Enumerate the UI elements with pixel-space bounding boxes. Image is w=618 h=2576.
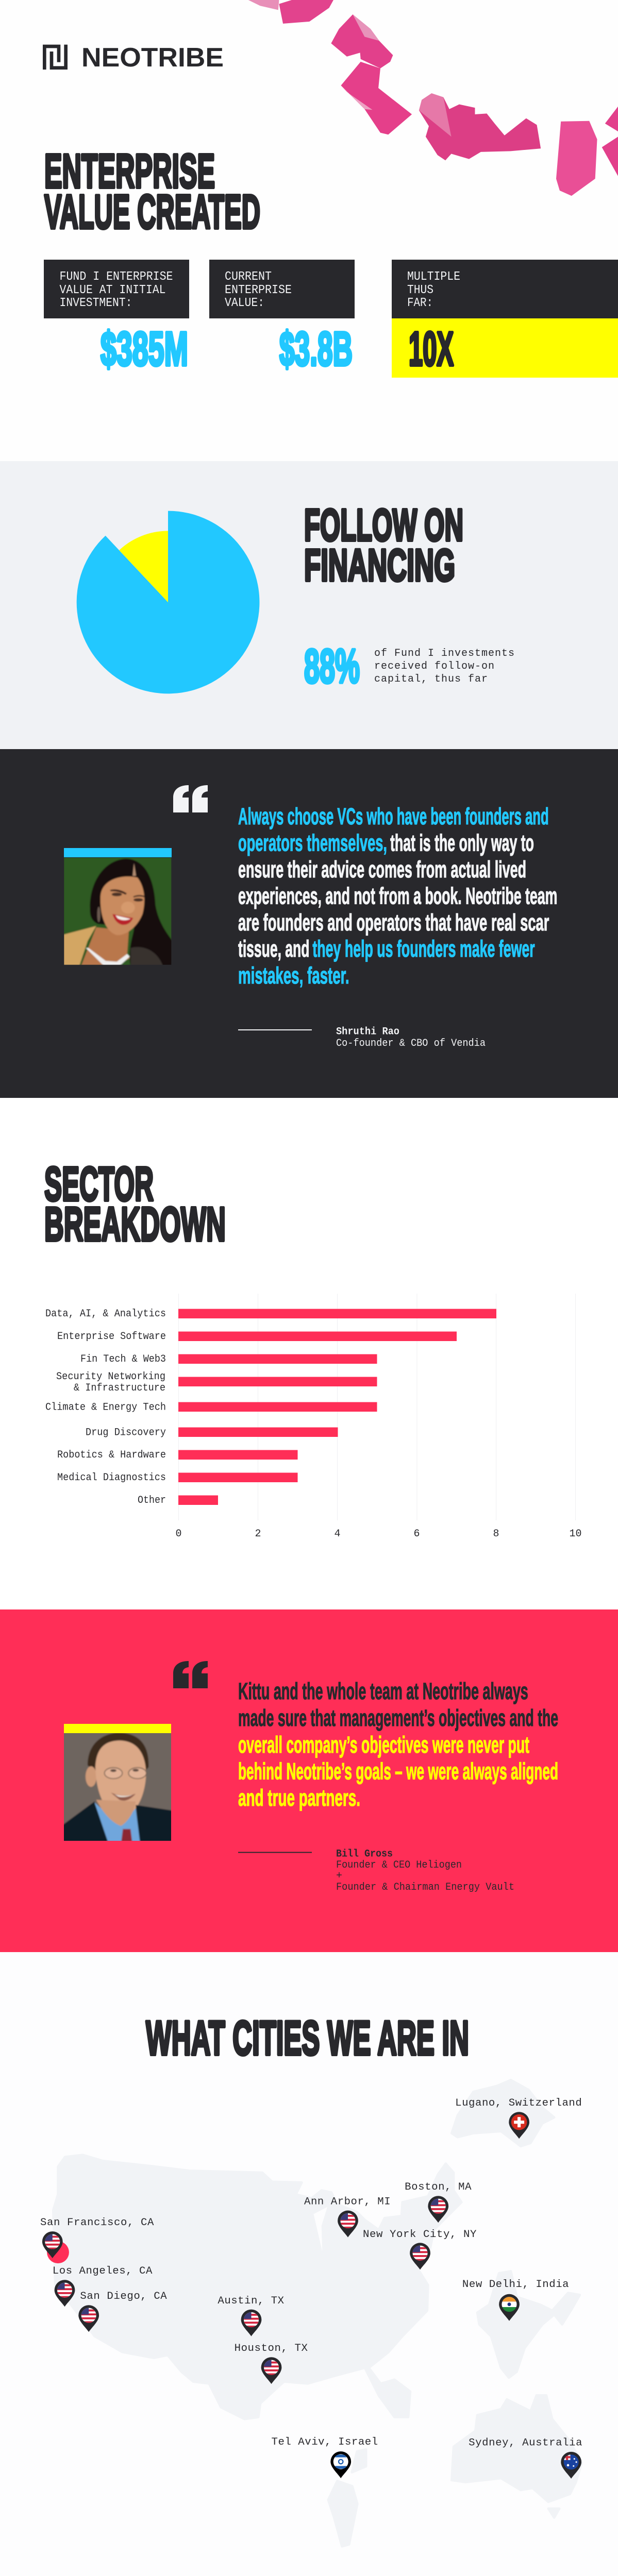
panel: sector breakdown (0, 1098, 618, 1609)
quote text: and true partners. (238, 1785, 360, 1811)
stat: current value: $3.8B (279, 322, 353, 376)
bar chart: Other (138, 1495, 166, 1506)
heading (44, 1157, 226, 1251)
heading: BREAKDOWN (44, 1197, 226, 1251)
attribution: Bill Gross (336, 1849, 393, 1860)
heading: SECTOR (44, 1157, 154, 1211)
heading: FOLLOW ON (304, 500, 463, 550)
heading: ENTERPRISE (44, 144, 215, 198)
attribution: Co-founder & CBO of Vendia (336, 1038, 486, 1049)
bar chart: 4 (334, 1528, 341, 1540)
panel: what cities we are in (40, 2020, 583, 2548)
panel: enterprise value created (0, 0, 618, 461)
stat: 88 percent: 88% (304, 639, 360, 693)
city labels: Austin, TX (218, 2295, 285, 2307)
logo (43, 43, 224, 73)
pin: Lugano (509, 2112, 529, 2139)
attribution (238, 1026, 486, 1049)
stat: multiple: 10X (409, 322, 454, 376)
bar chart: 10 (569, 1528, 582, 1540)
city labels: Tel Aviv, Israel (272, 2436, 378, 2448)
stat: multiple: THUS (407, 283, 433, 297)
icon: quote mark (173, 785, 208, 812)
pin: Sydney (561, 2452, 581, 2479)
pin: New York City (410, 2243, 430, 2269)
bar chart: Robotics & Hardware (57, 1449, 166, 1461)
pin: Austin (241, 2310, 261, 2336)
pin: Tel Aviv (330, 2451, 351, 2478)
bar chart: 2 (255, 1528, 261, 1540)
panel: quote Shruthi Rao (0, 749, 618, 1098)
stat: current value: VALUE: (225, 296, 264, 310)
stat: multiple: MULTIPLE (407, 270, 460, 284)
attribution: Founder & Chairman Energy Vault (336, 1882, 514, 1893)
decorative crystals top (248, 0, 618, 196)
city labels: Los Angeles, CA (53, 2265, 153, 2277)
panel: follow on financing (0, 461, 618, 749)
attribution: + (336, 1870, 342, 1882)
stat: current value: CURRENT (225, 270, 272, 284)
bar chart: 8 (493, 1528, 499, 1540)
stat: initial value: FUND I ENTERPRISE (60, 270, 173, 284)
quote text (238, 803, 557, 989)
stat caption (374, 648, 514, 685)
stat: multiple (392, 260, 618, 378)
city labels: San Francisco, CA (40, 2217, 154, 2229)
bar chart: Security Networking (56, 1371, 165, 1383)
stat caption: capital, thus far (374, 673, 488, 685)
heading: VALUE CREATED (44, 185, 260, 239)
stat: initial value (44, 260, 189, 376)
city labels: Ann Arbor, MI (304, 2196, 391, 2208)
stat: current value: ENTERPRISE (225, 283, 292, 297)
pin: San Diego (78, 2305, 99, 2332)
attribution (238, 1849, 514, 1893)
bar chart: Fin Tech & Web3 (80, 1353, 166, 1365)
pin: New Delhi (499, 2294, 520, 2321)
bar chart (45, 1294, 582, 1540)
portrait: Shruthi Rao (64, 858, 171, 965)
map: country shapes (53, 2080, 582, 2547)
stat: initial value: $385M (101, 322, 188, 376)
bar chart: Data, AI, & Analytics (45, 1308, 166, 1320)
bar chart: Enterprise Software (57, 1331, 166, 1343)
stat caption: of Fund I investments (374, 648, 514, 659)
attribution: Shruthi Rao (336, 1026, 399, 1038)
icon: neotribe mark (43, 45, 68, 70)
city labels: Houston, TX (235, 2343, 308, 2354)
portrait bar (64, 848, 172, 857)
marker: highlight dot (47, 2241, 69, 2263)
pin: Houston (261, 2357, 281, 2384)
city labels: Lugano, Switzerland (455, 2097, 582, 2109)
portrait bar (64, 1724, 171, 1733)
bar chart: 6 (413, 1528, 420, 1540)
quote text: mistakes, faster. (238, 962, 349, 989)
city labels: New York City, NY (363, 2229, 477, 2241)
bar chart: 0 (175, 1528, 182, 1540)
bar chart: Climate & Energy Tech (45, 1401, 166, 1414)
stat: initial value: VALUE AT INITIAL (60, 283, 166, 297)
stat: initial value: INVESTMENT: (60, 296, 132, 310)
bar chart: & Infrastructure (74, 1382, 165, 1394)
pin: Boston (428, 2196, 448, 2223)
portrait: Bill Gross (64, 1733, 171, 1841)
bar chart: Drug Discovery (86, 1427, 166, 1438)
city labels: Boston, MA (405, 2181, 472, 2193)
heading (44, 144, 260, 239)
heading (304, 500, 463, 590)
pin: Los Angeles (55, 2280, 75, 2307)
wordmark: NEOTRIBE (81, 43, 224, 73)
city labels: San Diego, CA (80, 2291, 167, 2302)
stat caption: received follow-on (374, 660, 494, 672)
city labels: New Delhi, India (462, 2279, 569, 2291)
quote text: tissue, and (238, 936, 309, 962)
stat: current value (209, 260, 355, 376)
panel: quote Bill Gross (0, 1609, 618, 1952)
quote text: operators themselves, (238, 830, 387, 856)
attribution: Founder & CEO Heliogen (336, 1859, 462, 1871)
pin: San Francisco (42, 2231, 63, 2258)
city labels (40, 2097, 582, 2449)
city labels: Sydney, Australia (469, 2437, 582, 2449)
icon: quote mark (173, 1661, 208, 1688)
heading: FINANCING (304, 540, 455, 590)
stat: multiple: FAR: (407, 296, 433, 310)
quote text (238, 1678, 558, 1811)
pie chart (77, 511, 259, 693)
pin: Ann Arbor (338, 2211, 358, 2238)
bar chart: Medical Diagnostics (57, 1472, 166, 1484)
